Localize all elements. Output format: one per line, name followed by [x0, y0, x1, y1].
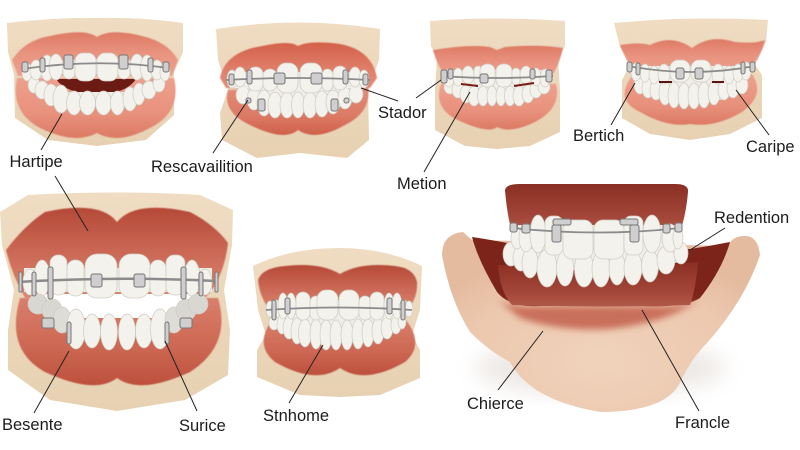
lower teeth backing	[237, 86, 360, 108]
upper teeth backing	[24, 268, 212, 292]
labels: Francle	[675, 414, 730, 432]
braces wire and brackets	[22, 55, 169, 72]
labels: Rescavailition	[151, 158, 253, 176]
lower teeth	[269, 315, 406, 350]
labels: Metion	[397, 175, 447, 193]
leader lines	[34, 80, 769, 413]
braces wire and brackets	[441, 69, 553, 83]
labels: Surice	[179, 417, 226, 435]
panel: jaw with chin	[442, 184, 760, 412]
lower teeth backing	[446, 80, 548, 98]
chin and lower jaw	[442, 232, 760, 412]
upper gum	[505, 184, 688, 232]
upper teeth	[23, 254, 212, 298]
lower teeth backing	[272, 316, 405, 338]
lower teeth backing	[30, 78, 162, 102]
labels: Stnhome	[263, 407, 329, 425]
dark mouth gap	[56, 79, 136, 94]
lower teeth backing	[506, 244, 686, 270]
upper teeth	[227, 63, 369, 93]
panel: model top middle, hooks	[216, 22, 380, 158]
upper teeth	[511, 215, 683, 259]
lower teeth	[444, 80, 550, 106]
upper teeth	[631, 60, 751, 84]
white mouth opening	[38, 294, 200, 318]
labels: Bertich	[573, 127, 624, 145]
upper teeth backing	[230, 72, 366, 88]
braces wire and brackets	[627, 62, 755, 79]
labels: Redention	[714, 209, 789, 227]
lower teeth backing	[636, 78, 748, 100]
mouth cavity	[472, 237, 730, 306]
upper teeth backing	[272, 300, 404, 318]
braces wire and brackets	[226, 70, 370, 111]
lip	[496, 298, 700, 330]
panel: model bottom centre	[253, 248, 422, 397]
panel: model top left, open bite	[7, 18, 183, 146]
lower teeth	[28, 294, 208, 350]
upper teeth backing	[446, 70, 550, 84]
labels: Besente	[2, 416, 63, 434]
panel: model top centre right	[430, 18, 565, 149]
lower teeth	[236, 85, 363, 118]
labels: Hartipe	[10, 153, 63, 171]
lower teeth	[503, 242, 688, 287]
lower teeth	[634, 76, 748, 109]
upper teeth	[22, 53, 170, 81]
labels: Stador	[378, 104, 427, 122]
upper teeth backing	[518, 225, 676, 244]
braces wire and brackets	[266, 298, 412, 320]
lower teeth	[28, 76, 165, 115]
braces wire and brackets	[18, 267, 218, 344]
panel: model top right	[614, 19, 768, 140]
upper teeth backing	[24, 59, 168, 78]
labels	[2, 104, 795, 435]
dark tooth gaps	[461, 83, 534, 86]
labels: Chierce	[467, 395, 524, 413]
panel: model bottom left, large open mouth	[0, 192, 233, 411]
braces wire and brackets	[510, 219, 682, 242]
dark tooth gaps	[659, 81, 724, 83]
jaw shadow	[475, 340, 725, 396]
labels: Caripe	[746, 138, 795, 156]
upper teeth	[444, 64, 550, 87]
upper teeth	[266, 290, 413, 320]
upper teeth backing	[632, 66, 750, 80]
lower gum	[498, 262, 698, 306]
